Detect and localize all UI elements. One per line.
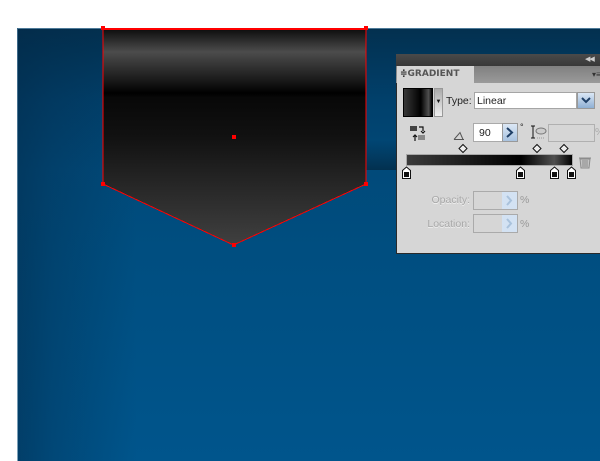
opacity input [473,191,518,210]
icon: aspect ratio [531,126,546,138]
label: Location: Location: [427,218,470,230]
type select: Linear [477,95,506,107]
tab row [396,66,600,83]
type select [474,92,577,109]
select arrow button [577,92,595,109]
label: Opacity: Opacity: [431,194,470,206]
gradient bar with stops [402,144,591,179]
swatch dropdown [434,88,443,117]
tab: GRADIENT [397,66,474,83]
collapse arrows: ◀◀ [585,56,594,63]
icon: angle [454,132,464,140]
opacity percent: % [520,194,529,206]
swatch dropdown: ▼ [436,99,441,105]
label: Type: Type: [446,95,472,107]
aspect ratio input disabled [548,124,595,142]
angle input [473,123,503,142]
panel: gradient [396,54,600,254]
angle input: 90 [479,127,491,139]
angle stepper button [502,123,518,142]
tab: GRADIENT: ≑GRADIENT [400,69,459,79]
gradient preview swatch [403,88,433,117]
location input [473,214,518,233]
panel title bar [396,54,600,66]
icon: reverse gradient [410,126,426,141]
location percent: % [520,218,529,230]
degree sign: ° [520,122,524,132]
